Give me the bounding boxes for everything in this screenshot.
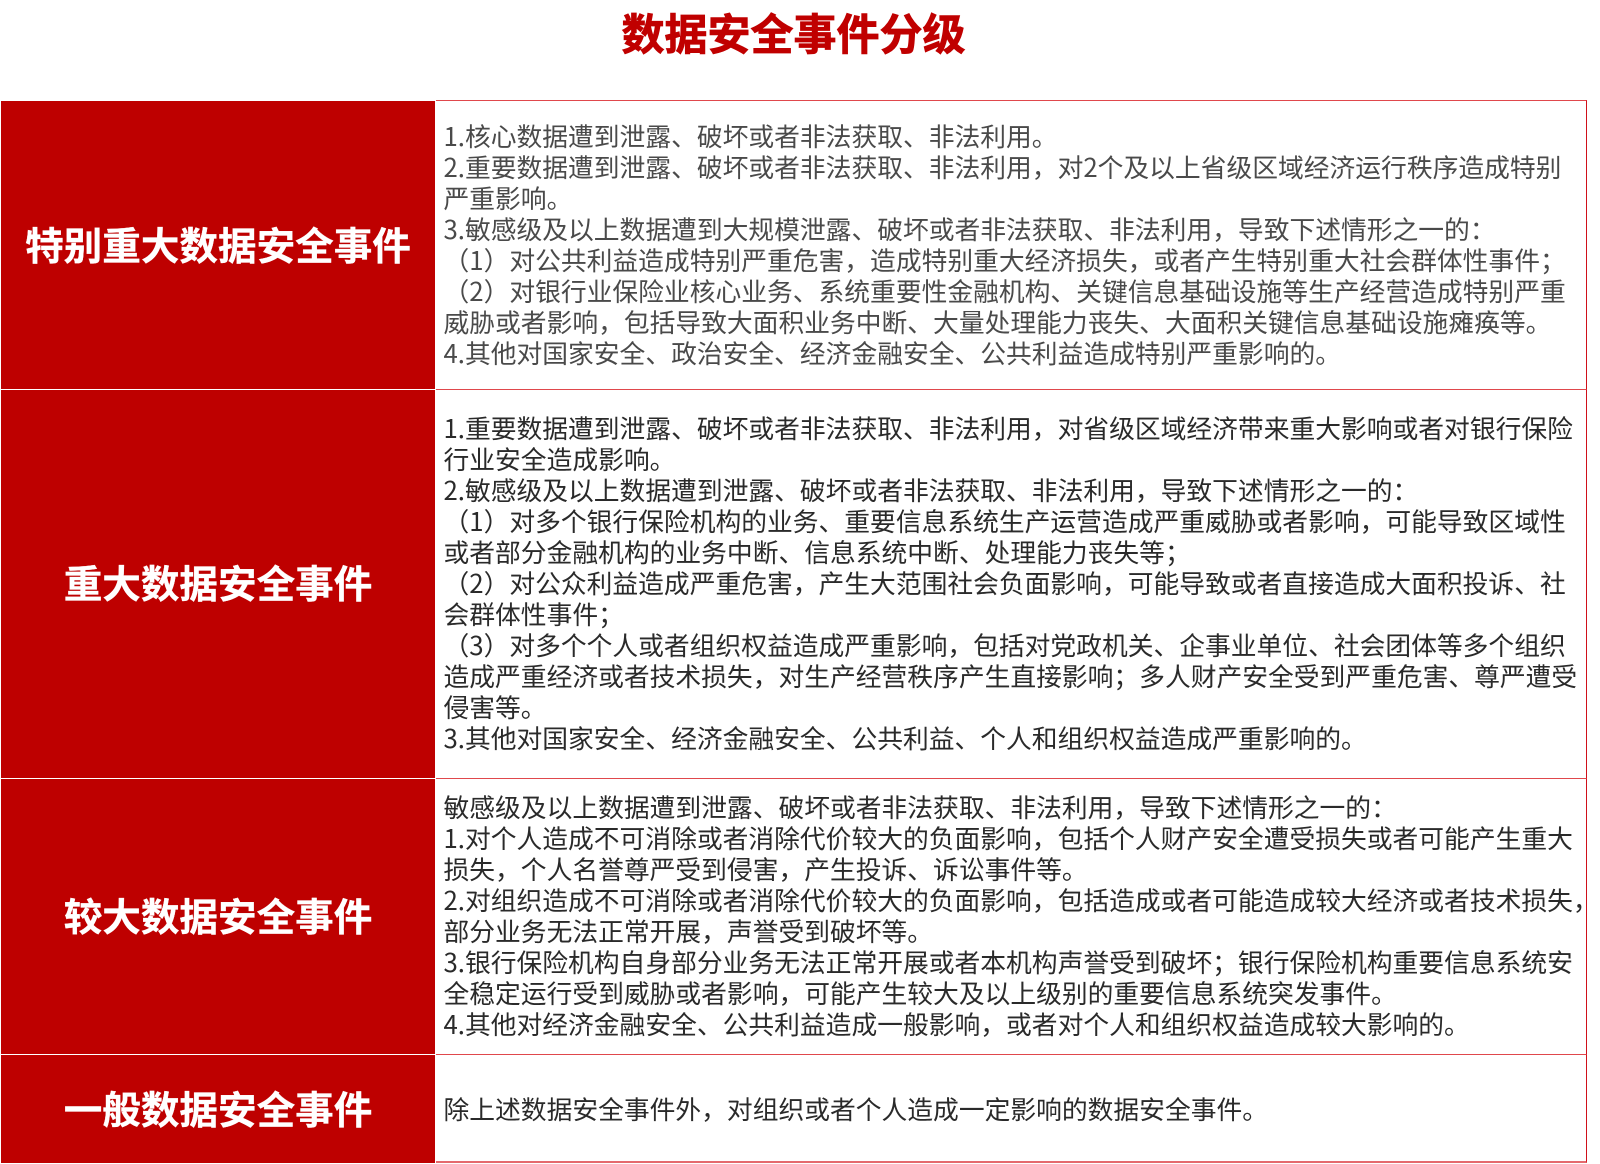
heading: 重大数据安全事件: 重大数据安全事件 [64, 554, 372, 610]
heading: 特别重大数据安全事件: 特别重大数据安全事件 [25, 216, 411, 272]
text block: 特别重大 criteria: 威胁或者影响，包括导致大面积业务中断、大量处理能力丧失、大面积关键信息基础设施瘫痪等。 [444, 303, 1551, 340]
text block: 重大 criteria: 2.敏感级及以上数据遭到泄露、破坏或者非法获取、非法利用，导致下述情形之一的： [444, 471, 1418, 508]
text block: 重大 criteria: 会群体性事件； [444, 595, 624, 632]
heading: 一般数据安全事件 [1, 1055, 435, 1163]
text block: 重大 criteria: （1）对多个银行保险机构的业务、重要信息系统生产运营造成严重威胁或者影响，可能导致区域性 [444, 502, 1566, 539]
text block: 重大 criteria: 1.重要数据遭到泄露、破坏或者非法获取、非法利用，对省级区域经济带来重大影响或者对银行保险 [444, 409, 1573, 446]
text block: 特别重大 criteria: （1）对公共利益造成特别严重危害，造成特别重大经济损失，或者产生特别重大社会群体性事件； [444, 241, 1566, 278]
text block: 重大 criteria: （3）对多个个人或者组织权益造成严重影响，包括对党政机关、企事业单位、社会团体等多个组织 [444, 626, 1566, 663]
text block: 较大 criteria: 敏感级及以上数据遭到泄露、破坏或者非法获取、非法利用，导致下述情形之一的： [444, 788, 1397, 825]
text block: 特别重大 criteria: 4.其他对国家安全、政治安全、经济金融安全、公共利益造成特别严重影响的。 [444, 334, 1341, 371]
text block: 较大 criteria: 4.其他对经济金融安全、公共利益造成一般影响，或者对个人和组织权益造成较大影响的。 [444, 1005, 1470, 1042]
heading: 重大数据安全事件 [1, 390, 435, 778]
text block: 较大 criteria [436, 778, 1587, 1054]
text block: 特别重大 criteria: 2.重要数据遭到泄露、破坏或者非法获取、非法利用，对2个及以上省级区域经济运行秩序造成特别 [444, 148, 1561, 185]
heading: 特别重大数据安全事件 [1, 101, 435, 389]
text block: 特别重大 criteria: 严重影响。 [444, 179, 572, 216]
text block: 较大 criteria: 2.对组织造成不可消除或者消除代价较大的负面影响，包括造成或者可能造成较大经济或者技术损失， [444, 881, 1599, 918]
text block: 特别重大 criteria: 3.敏感级及以上数据遭到大规模泄露、破坏或者非法获取、非法利用，导致下述情形之一的： [444, 210, 1496, 247]
text block: 一般 criteria: 除上述数据安全事件外，对组织或者个人造成一定影响的数据安全事件。 [444, 1090, 1268, 1127]
panel: 重大数据安全事件 [1, 389, 1587, 778]
text block: 重大 criteria: 或者部分金融机构的业务中断、信息系统中断、处理能力丧失等； [444, 533, 1191, 570]
heading: 较大数据安全事件: 较大数据安全事件 [64, 887, 372, 943]
text block: 重大 criteria: （2）对公众利益造成严重危害，产生大范围社会负面影响，可能导致或者直接造成大面积投诉、社 [444, 564, 1566, 601]
text block: 特别重大 criteria [436, 100, 1587, 389]
text block: 重大 criteria [436, 389, 1587, 778]
text block: 较大 criteria: 全稳定运行受到威胁或者影响，可能产生较大及以上级别的重要信息系统突发事件。 [444, 974, 1397, 1011]
title: 数据安全事件分级 [622, 1, 966, 63]
text block: 重大 criteria: 侵害等。 [444, 688, 547, 725]
heading: 一般数据安全事件: 一般数据安全事件 [64, 1080, 372, 1136]
panel: 特别重大数据安全事件 [1, 100, 1587, 389]
text block: 较大 criteria: 1.对个人造成不可消除或者消除代价较大的负面影响，包括个人财产安全遭受损失或者可能产生重大 [444, 819, 1573, 856]
text block: 较大 criteria: 损失，个人名誉尊严受到侵害，产生投诉、诉讼事件等。 [444, 850, 1088, 887]
text block: 特别重大 criteria: （2）对银行业保险业核心业务、系统重要性金融机构、关键信息基础设施等生产经营造成特别严重 [444, 272, 1566, 309]
panel: 较大数据安全事件 [1, 778, 1599, 1054]
text block: 一般 criteria [436, 1054, 1587, 1163]
text block: 较大 criteria: 部分业务无法正常开展，声誉受到破坏等。 [444, 912, 933, 949]
panel: 一般数据安全事件 [1, 1054, 1587, 1163]
heading: 较大数据安全事件 [1, 779, 435, 1054]
text block: 较大 criteria: 3.银行保险机构自身部分业务无法正常开展或者本机构声誉受到破坏；银行保险机构重要信息系统安 [444, 943, 1573, 980]
text block: 特别重大 criteria: 1.核心数据遭到泄露、破坏或者非法获取、非法利用。 [444, 117, 1058, 154]
text block: 重大 criteria: 3.其他对国家安全、经济金融安全、公共利益、个人和组织权益造成严重影响的。 [444, 719, 1367, 756]
text block: 重大 criteria: 行业安全造成影响。 [444, 440, 675, 477]
text block: 重大 criteria: 造成严重经济或者技术损失，对生产经营秩序产生直接影响；多人财产安全受到严重危害、尊严遭受 [444, 657, 1577, 694]
